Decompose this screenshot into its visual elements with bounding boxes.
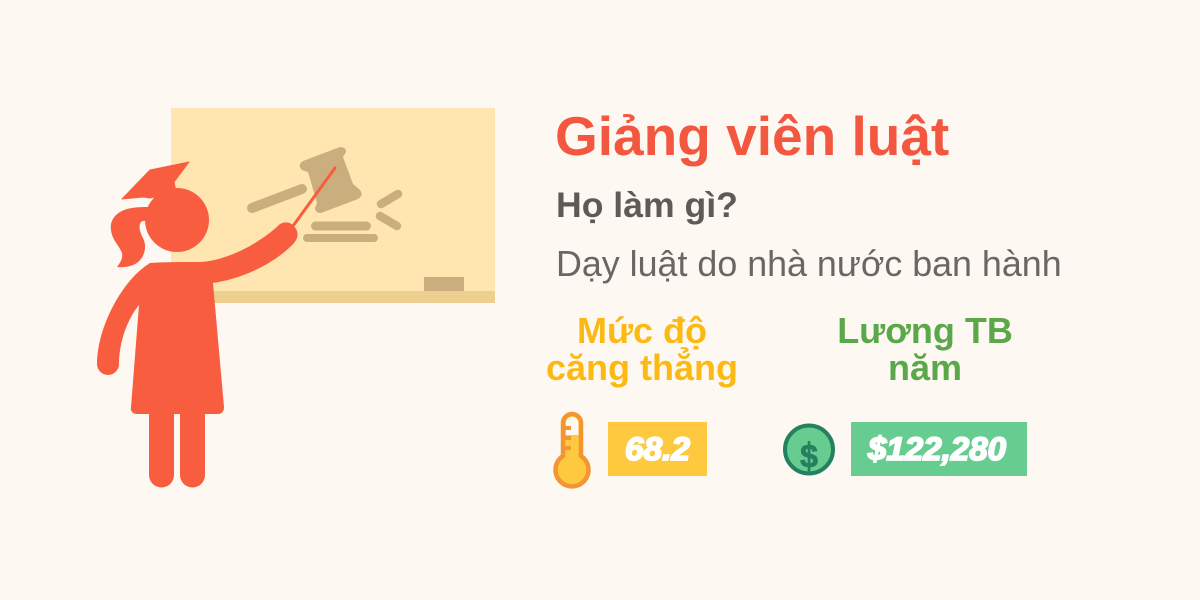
chalkboard — [171, 108, 495, 303]
label: average annual salary: năm — [888, 347, 962, 388]
pointer stick — [293, 168, 335, 226]
icon: thermometer — [556, 414, 589, 486]
label: stress level: căng thẳng — [546, 346, 738, 388]
icon: eraser — [424, 277, 464, 291]
stress value box — [608, 422, 707, 476]
salary value box: $122,280 — [867, 431, 1006, 467]
label: stress level: Mức độ — [577, 310, 707, 351]
subheading: Họ làm gì? — [556, 185, 738, 225]
salary value box — [851, 422, 1027, 476]
stress value box: 68.2 — [625, 431, 690, 467]
ponytail — [111, 207, 150, 267]
label: average annual salary: Lương TB — [837, 310, 1013, 351]
figure: teacher — [97, 162, 335, 488]
icon: gavel — [252, 147, 398, 238]
icon: dollar coin — [785, 426, 833, 474]
body and arms — [97, 222, 298, 488]
graduation cap — [122, 162, 189, 199]
head — [145, 188, 209, 252]
description: Dạy luật do nhà nước ban hành — [556, 244, 1062, 284]
icon: dollar coin: $ — [800, 438, 818, 474]
title: Giảng viên luật — [555, 105, 949, 167]
